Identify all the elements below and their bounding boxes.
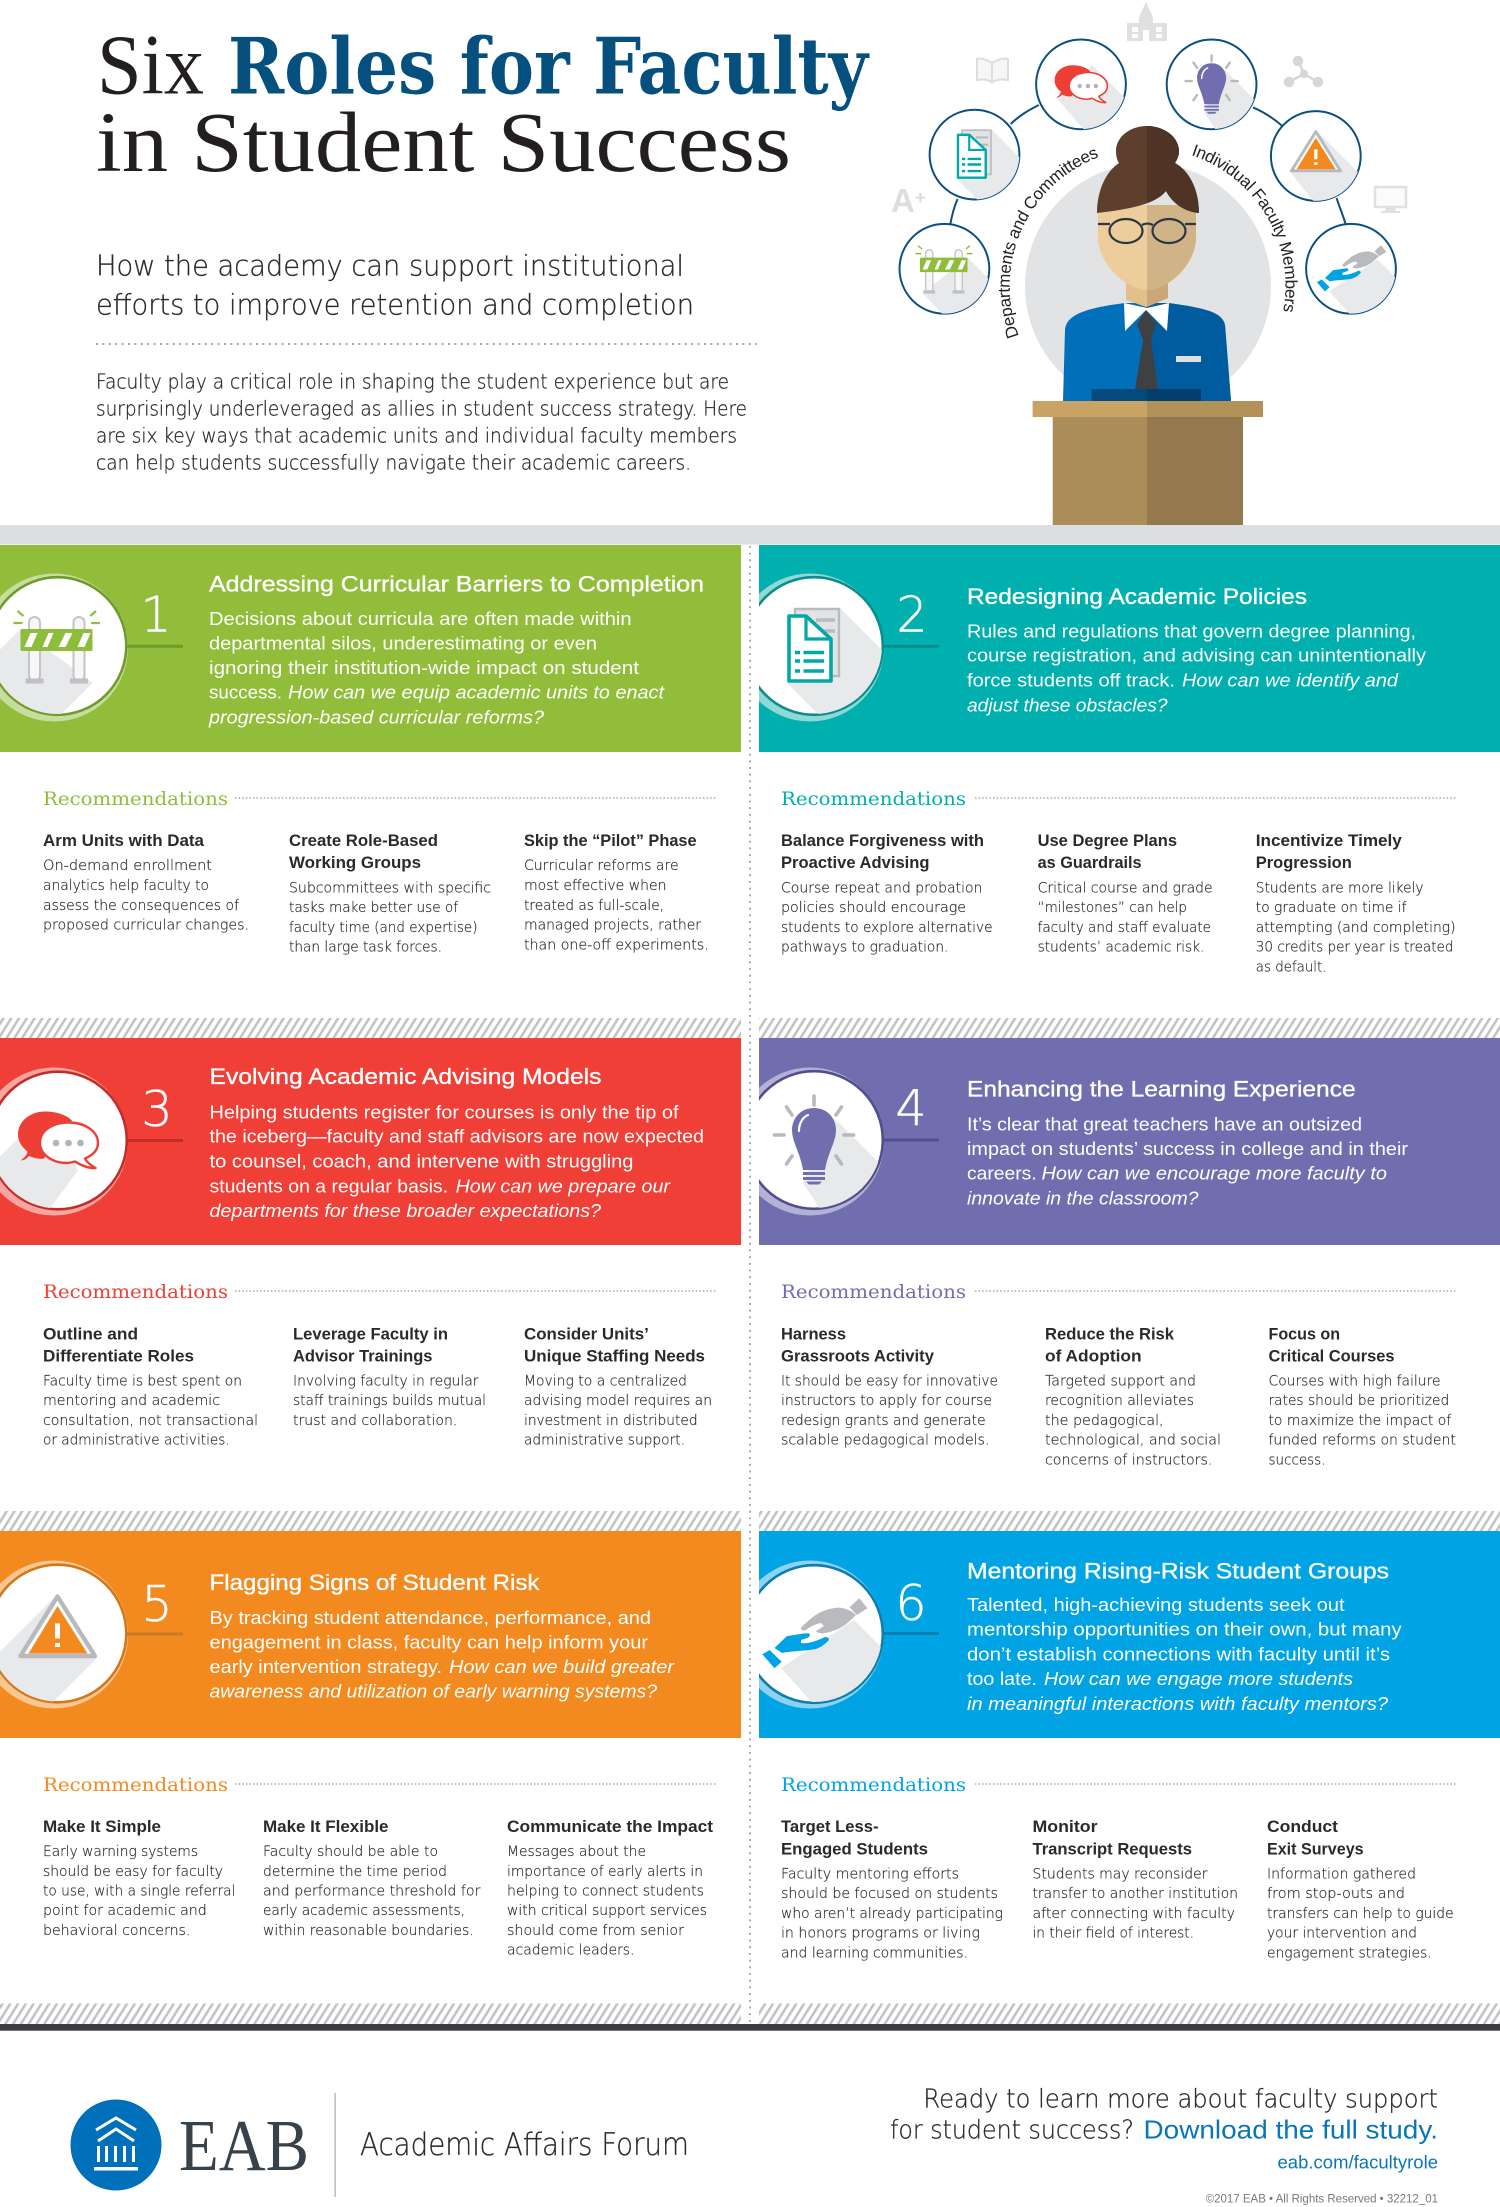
recommendations heading: Recommendations (781, 1282, 966, 1303)
rec: critical courses: rates should be prioritized (1268, 1393, 1449, 1409)
rec: communicate impact: academic leaders. (507, 1943, 634, 1959)
description: departmental silos, underestimating or even (209, 633, 597, 653)
call to action: eab.com/facultyrole (1278, 2151, 1438, 2172)
panel 6 recommendations (781, 1775, 1456, 1962)
EAB logo (70, 2100, 309, 2190)
rec: arm units: assess the consequences of (43, 898, 239, 914)
rec: make it flexible: within reasonable boundaries. (263, 1923, 474, 1939)
rec: skip pilot: managed projects, rather (524, 918, 701, 934)
rec: exit surveys: from stop-outs and (1267, 1886, 1405, 1902)
panel 1 recommendations (43, 789, 716, 956)
call to action (890, 2084, 1438, 2172)
rec: make it flexible (263, 1818, 481, 1939)
description: course registration, and advising can unintentionally (967, 646, 1426, 666)
rec: exit surveys: Conduct (1267, 1818, 1339, 1836)
heading: Mentoring Rising-Risk Student Groups (967, 1558, 1389, 1583)
rec: skip pilot: Curricular reforms are (524, 858, 679, 874)
title: Six (97, 16, 204, 112)
figure: professor (1063, 126, 1231, 401)
rec: make it flexible: Faculty should be able to (263, 1844, 438, 1860)
rec: outline roles: consultation, not transactional (43, 1413, 258, 1429)
curved label: departments and committees: Departments and Committees (998, 150, 1098, 338)
rec: working groups: faculty time (and expertise) (289, 920, 478, 936)
copyright: ©2017 EAB • All Rights Reserved • 32212_01 (1206, 2193, 1438, 2205)
description (208, 609, 665, 727)
description: Helping students register for courses is only the tip of (210, 1102, 680, 1122)
description: mentorship opportunities on their own, but many (967, 1620, 1402, 1640)
description: innovate in the classroom? (967, 1188, 1198, 1208)
rec: outline roles: mentoring and academic (43, 1393, 220, 1409)
rec: timely progression (1256, 832, 1456, 976)
intro paragraph: are six key ways that academic units and individual faculty members (96, 424, 737, 448)
icon: barrier (0, 574, 183, 722)
rec: target less-engaged: Engaged Students (781, 1840, 928, 1858)
description: early intervention strategy. (210, 1657, 442, 1677)
hatch bands (0, 1018, 1500, 2024)
rec: communicate impact: should come from senior (507, 1923, 684, 1939)
subtitle: How the academy can support institutional (96, 250, 684, 282)
heading: Enhancing the Learning Experience (967, 1077, 1356, 1102)
hero icon: bulb (1166, 38, 1258, 130)
rec: critical courses: Focus on (1268, 1326, 1340, 1344)
rec: make it simple: to use, with a single referral (43, 1884, 235, 1900)
rec: target less-engaged: Target Less- (781, 1818, 878, 1836)
panel 6: mentoring (736, 1531, 1500, 1749)
icon: chat bubbles (0, 1068, 183, 1216)
description: How can we prepare our (456, 1176, 671, 1196)
rec: skip pilot: Skip the “Pilot” Phase (524, 832, 697, 850)
subtitle (96, 250, 694, 322)
hero icon: hands (1305, 222, 1397, 315)
rec: skip pilot: treated as full-scale, (524, 898, 664, 914)
rec: staffing needs: investment in distributed (524, 1413, 698, 1429)
panel 2: academic policies (736, 545, 1500, 753)
rec: working groups: Working Groups (289, 854, 421, 872)
rec: critical courses: success. (1268, 1452, 1326, 1468)
rec: forgiveness: Course repeat and probation (781, 880, 982, 896)
rec: make it flexible: determine the time period (263, 1864, 447, 1880)
rec: critical courses: funded reforms on student (1268, 1432, 1456, 1448)
description: engagement in class, faculty can help inform your (210, 1632, 648, 1652)
rec: communicate impact (507, 1818, 714, 1959)
description: Talented, high-achieving students seek out (967, 1595, 1344, 1615)
rec: degree plans: students’ academic risk. (1038, 940, 1204, 956)
rec: transcript requests: Transcript Requests (1032, 1840, 1192, 1858)
rec: skip pilot: most effective when (524, 878, 666, 894)
description: impact on students’ success in college and in their (967, 1139, 1408, 1159)
rec: adoption risk: Reduce the Risk (1045, 1326, 1175, 1344)
rec: grassroots: Harness (781, 1326, 846, 1344)
call to action: for student success? (890, 2115, 1134, 2145)
rec: grassroots: redesign grants and generate (781, 1413, 986, 1429)
rec: advisor trainings: trust and collaboration. (293, 1413, 457, 1429)
rec: forgiveness: Balance Forgiveness with (781, 832, 984, 850)
description: careers. (967, 1164, 1037, 1184)
rec: timely progression: 30 credits per year is treated (1256, 940, 1454, 956)
rec: forgiveness: policies should encourage (781, 900, 966, 916)
icon: warning triangle (0, 1560, 183, 1708)
subtitle: efforts to improve retention and completion (96, 289, 694, 322)
rec: working groups: Subcommittees with specific (289, 880, 491, 896)
rec: degree plans: Critical course and grade (1038, 880, 1213, 896)
rec: adoption risk: the pedagogical, (1045, 1413, 1164, 1429)
hero icon: barrier (898, 222, 990, 315)
rec: outline roles: Faculty time is best spent on (43, 1373, 242, 1389)
rec: staffing needs: Unique Staffing Needs (524, 1348, 705, 1366)
recommendations heading: Recommendations (43, 1775, 228, 1796)
rec: degree plans: as Guardrails (1038, 854, 1142, 872)
rec: grassroots: It should be easy for innovative (781, 1373, 998, 1389)
rec: timely progression: Students are more likely (1256, 880, 1424, 896)
description: adjust these obstacles? (967, 696, 1168, 716)
rec: degree plans: Use Degree Plans (1038, 832, 1177, 850)
rec: staffing needs: administrative support. (524, 1432, 685, 1448)
rec: grassroots (781, 1326, 998, 1448)
rec: exit surveys: Exit Surveys (1267, 1840, 1364, 1858)
description: progression-based curricular reforms? (208, 707, 544, 727)
rec: critical courses: Critical Courses (1268, 1348, 1394, 1366)
logo wordmark: EAB (179, 2105, 309, 2186)
description: departments for these broader expectations? (210, 1201, 601, 1221)
rec: arm units: proposed curricular changes. (43, 918, 249, 934)
panel 3 recommendations (43, 1282, 716, 1448)
description: Decisions about curricula are often made within (209, 609, 632, 629)
rec: critical courses (1268, 1326, 1456, 1468)
podium (1033, 401, 1263, 525)
rec: skip pilot (524, 832, 709, 954)
icon: A plus: + (915, 188, 926, 209)
rec: make it simple: should be easy for faculty (43, 1864, 223, 1880)
title (96, 16, 870, 190)
rec: transcript requests: transfer to another institution (1032, 1886, 1238, 1902)
rec: degree plans (1038, 832, 1213, 956)
rec: communicate impact: helping to connect students (507, 1884, 704, 1900)
rec: working groups: Create Role-Based (289, 832, 438, 850)
rec: staffing needs (524, 1326, 712, 1448)
hero icon: document (928, 108, 1020, 200)
rec: transcript requests: Students may reconsider (1032, 1866, 1208, 1882)
recommendations heading: Recommendations (781, 1775, 966, 1796)
call to action: Download the full study. (1144, 2114, 1438, 2144)
rec: adoption risk: technological, and social (1045, 1432, 1221, 1448)
rec: timely progression: Incentivize Timely (1256, 832, 1402, 850)
intro paragraph (96, 369, 747, 475)
number 6: 6 (895, 1575, 927, 1632)
logo mark (70, 2100, 162, 2190)
rec: exit surveys (1267, 1818, 1454, 1962)
description (210, 1102, 704, 1221)
description: in meaningful interactions with faculty mentors? (967, 1694, 1388, 1714)
recommendations heading: Recommendations (43, 1282, 228, 1303)
panel 2 recommendations (781, 789, 1456, 976)
number 3: 3 (141, 1081, 173, 1138)
description: too late. (967, 1669, 1037, 1689)
icon: reaching hands (759, 1560, 939, 1708)
curved label: individual faculty members: Individual Faculty Members (1192, 144, 1298, 312)
panel 5: student risk (0, 1531, 741, 1738)
call to action: Ready to learn more about faculty support (923, 2084, 1438, 2114)
rec: exit surveys: transfers can help to guide (1267, 1906, 1454, 1922)
rec: critical courses: Courses with high failure (1268, 1373, 1440, 1389)
icon: open book (977, 59, 1008, 82)
rec: exit surveys: your intervention and (1267, 1926, 1417, 1942)
description: ignoring their institution-wide impact on student (209, 658, 639, 678)
connector lines (950, 105, 1346, 224)
rec: grassroots: instructors to apply for course (781, 1393, 992, 1409)
rec: make it simple: Early warning systems (43, 1844, 198, 1860)
recommendations heading: Recommendations (43, 789, 228, 810)
rec: target less-engaged: should be focused on students (781, 1886, 998, 1902)
icon: document (759, 574, 939, 722)
rec: make it flexible: Make It Flexible (263, 1818, 388, 1836)
rec: communicate impact: Communicate the Impact (507, 1818, 714, 1836)
hero icon: chat (1035, 38, 1127, 130)
description: How can we engage more students (1044, 1669, 1353, 1689)
rec: transcript requests: in their field of interest. (1032, 1926, 1194, 1942)
rec: forgiveness: Proactive Advising (781, 854, 930, 872)
rec: communicate impact: with critical support services (507, 1903, 707, 1919)
number 4: 4 (895, 1080, 927, 1137)
description: don’t establish connections with faculty until it’s (967, 1644, 1390, 1664)
description: force students off track. (967, 671, 1175, 691)
rec: forgiveness (781, 832, 992, 956)
rec: advisor trainings: Involving faculty in regular (293, 1373, 479, 1389)
description: Rules and regulations that govern degree planning, (967, 621, 1416, 641)
rec: target less-engaged (781, 1818, 1003, 1962)
rec: skip pilot: than one-off experiments. (524, 938, 709, 954)
rec: arm units (43, 832, 249, 934)
rec: adoption risk: Targeted support and (1045, 1373, 1196, 1389)
panel 4: learning experience (736, 1038, 1500, 1260)
hero icon: warning (1270, 110, 1362, 202)
heading: Redesigning Academic Policies (967, 584, 1307, 609)
rec: advisor trainings: Leverage Faculty in (293, 1326, 448, 1344)
recommendations heading: Recommendations (781, 789, 966, 810)
description: How can we build greater (449, 1657, 675, 1677)
heading: Flagging Signs of Student Risk (210, 1570, 540, 1595)
rec: target less-engaged: who aren’t already participating (781, 1906, 1003, 1922)
rec: transcript requests: Monitor (1032, 1818, 1098, 1836)
description: How can we equip academic units to enact (288, 682, 665, 702)
rec: critical courses: to maximize the impact of (1268, 1413, 1451, 1429)
description: How can we encourage more faculty to (1042, 1164, 1387, 1184)
forum name: Academic Affairs Forum (360, 2127, 689, 2163)
centre dotted divider (749, 546, 751, 2024)
description (967, 621, 1426, 716)
rec: outline roles: Differentiate Roles (43, 1348, 194, 1366)
rec: degree plans: faculty and staff evaluate (1038, 920, 1211, 936)
panel 5 recommendations (43, 1775, 716, 1959)
rec: staffing needs: Moving to a centralized (524, 1373, 687, 1389)
description: awareness and utilization of early warning systems? (210, 1682, 657, 1702)
title: Roles for Faculty (228, 22, 870, 112)
rec: arm units: Arm Units with Data (43, 832, 205, 850)
rec: forgiveness: pathways to graduation. (781, 940, 948, 956)
description: It’s clear that great teachers have an outsized (967, 1115, 1362, 1135)
rec: advisor trainings: Advisor Trainings (293, 1348, 432, 1366)
rec: adoption risk: recognition alleviates (1045, 1393, 1194, 1409)
rec: make it simple: behavioral concerns. (43, 1923, 190, 1939)
rec: exit surveys: engagement strategies. (1267, 1946, 1432, 1962)
rec: outline roles: or administrative activities. (43, 1432, 230, 1448)
rec: grassroots: Grassroots Activity (781, 1348, 934, 1366)
panel 1: curricular barriers (0, 545, 741, 763)
rec: degree plans: “milestones” can help (1038, 900, 1187, 916)
intro paragraph: Faculty play a critical role in shaping the student experience but are (96, 369, 729, 393)
description: to counsel, coach, and intervene with struggling (210, 1152, 634, 1172)
rec: transcript requests (1032, 1818, 1238, 1942)
icon: monitor (1375, 187, 1406, 213)
description: By tracking student attendance, performance, and (210, 1608, 651, 1628)
icon: light bulb (759, 1068, 939, 1216)
number 2: 2 (896, 587, 928, 644)
rec: communicate impact: Messages about the (507, 1844, 646, 1860)
rec: make it simple (43, 1818, 235, 1939)
illustration: professor at podium (891, 2, 1408, 525)
description: the iceberg—faculty and staff advisors are now expected (210, 1127, 704, 1147)
top grey band (0, 525, 1500, 544)
rec: target less-engaged: Faculty mentoring efforts (781, 1866, 959, 1882)
rec: timely progression: attempting (and completing) (1256, 920, 1456, 936)
rec: transcript requests: after connecting with faculty (1032, 1906, 1235, 1922)
rec: advisor trainings: staff trainings builds mutual (293, 1393, 486, 1409)
rec: staffing needs: advising model requires an (524, 1393, 712, 1409)
panel 3: advising models (0, 1038, 741, 1248)
panel 4 recommendations (781, 1282, 1456, 1468)
icon: A plus: A (891, 182, 915, 219)
intro paragraph: can help students successfully navigate their academic careers. (96, 451, 691, 475)
rec: adoption risk: concerns of instructors. (1045, 1452, 1212, 1468)
rec: make it simple: point for academic and (43, 1903, 207, 1919)
description (210, 1608, 675, 1702)
rec: exit surveys: Information gathered (1267, 1866, 1416, 1882)
rec: make it flexible: early academic assessments, (263, 1903, 465, 1919)
rec: outline roles: Outline and (43, 1326, 138, 1344)
rec: arm units: analytics help faculty to (43, 878, 209, 894)
rec: working groups (289, 832, 491, 956)
description: success. (209, 682, 282, 702)
rec: timely progression: to graduate on time if (1256, 900, 1407, 916)
rec: forgiveness: students to explore alternative (781, 920, 992, 936)
rec: make it flexible: and performance threshold for (263, 1884, 481, 1900)
intro paragraph: surprisingly underleveraged as allies in student success strategy. Here (96, 396, 747, 420)
rec: outline roles (43, 1326, 258, 1448)
rec: advisor trainings (293, 1326, 486, 1429)
rec: timely progression: Progression (1256, 854, 1352, 872)
grey halo (1025, 163, 1271, 409)
rec: adoption risk (1045, 1326, 1221, 1468)
description (967, 1115, 1408, 1208)
rec: target less-engaged: in honors programs or living (781, 1926, 980, 1942)
heading: Addressing Curricular Barriers to Completion (209, 572, 704, 597)
icon: molecule (1285, 57, 1322, 86)
number 5: 5 (141, 1576, 173, 1633)
rec: timely progression: as default. (1256, 960, 1326, 976)
description: students on a regular basis. (210, 1176, 448, 1196)
rec: communicate impact: importance of early alerts in (507, 1864, 703, 1880)
title: in Student Success (96, 94, 791, 190)
rec: staffing needs: Consider Units’ (524, 1326, 649, 1344)
rec: arm units: On-demand enrollment (43, 858, 212, 874)
description: How can we identify and (1182, 671, 1399, 691)
rec: adoption risk: of Adoption (1045, 1348, 1142, 1366)
footer bar (0, 2024, 1500, 2031)
rec: make it simple: Make It Simple (43, 1818, 161, 1836)
rec: working groups: than large task forces. (289, 940, 442, 956)
number 1: 1 (140, 587, 172, 644)
rec: working groups: tasks make better use of (289, 900, 458, 916)
icon: campus building (1127, 2, 1167, 41)
rec: grassroots: scalable pedagogical models. (781, 1432, 990, 1448)
description (967, 1595, 1402, 1714)
heading: Evolving Academic Advising Models (210, 1064, 602, 1089)
rec: target less-engaged: and learning communities. (781, 1946, 968, 1962)
